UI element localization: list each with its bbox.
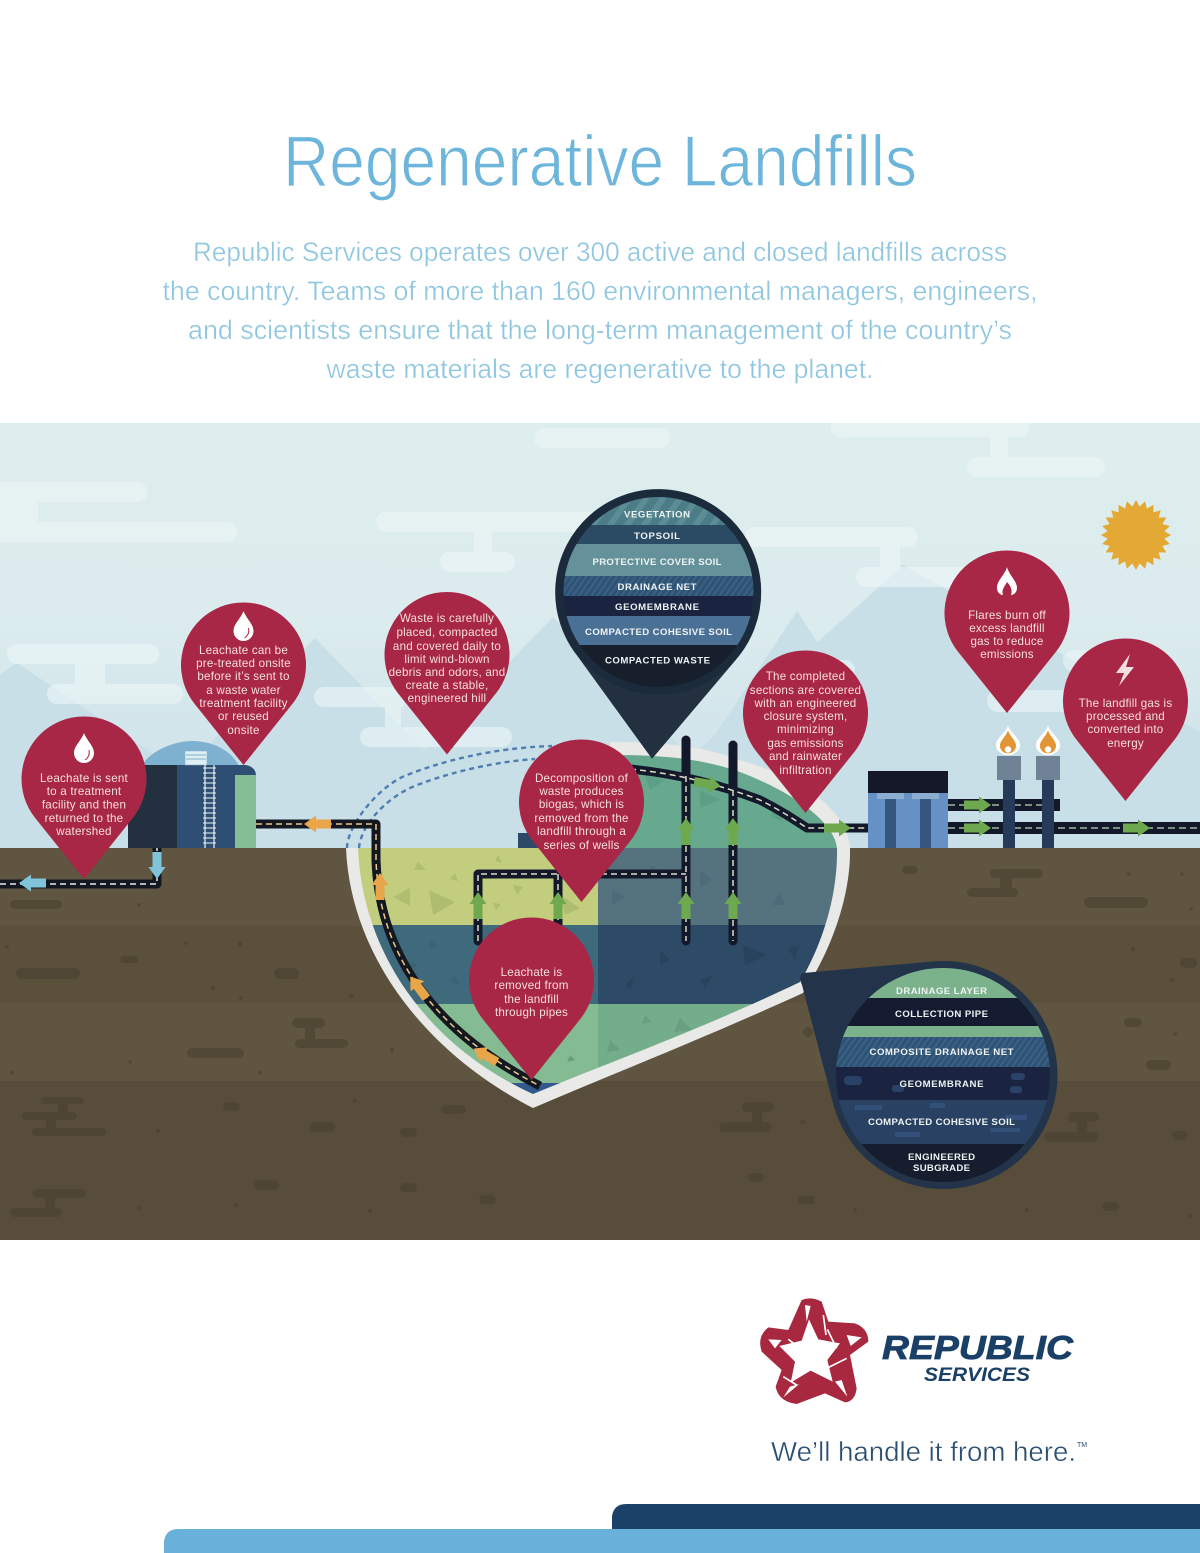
pin: leachate sent to treatment: Leachate is sent: [40, 772, 129, 785]
pin: leachate pre-treated: pre-treated onsite: [196, 657, 291, 670]
logo wordmark: REPUBLIC: [882, 1329, 1074, 1366]
landfill layers: [358, 755, 838, 1094]
power plant building: [868, 771, 948, 848]
pin: closure system: with an engineered: [754, 697, 856, 710]
pin: closure system: sections are covered: [750, 684, 861, 697]
pin: closure layers: COMPACTED WASTE: [605, 656, 711, 666]
ground layers: [0, 848, 1200, 1240]
pin: leachate pre-treated: a waste water: [206, 684, 281, 697]
pin: leachate removed: removed from: [494, 979, 569, 992]
pin: waste placement: create a stable,: [406, 679, 488, 692]
gas flares: [996, 726, 1060, 848]
sky background: [0, 423, 1200, 849]
pin: closure layers: [556, 490, 761, 758]
pin: flares: gas to reduce: [970, 635, 1044, 648]
pin: leachate sent to treatment: to a treatment: [47, 785, 122, 798]
flow arrows: [19, 773, 1150, 1069]
pin: liner layers: COMPOSITE DRAINAGE NET: [870, 1047, 1014, 1058]
dashed containment arcs: [347, 746, 552, 848]
pin: liner layers: COLLECTION PIPE: [895, 1009, 989, 1020]
pin: decomposition and biogas: series of wells: [543, 839, 620, 852]
intro text block: waste materials are regenerative to the planet.: [326, 354, 873, 384]
pin: decomposition and biogas: biogas, which is: [539, 798, 624, 811]
pin: flares: excess landfill: [969, 622, 1045, 635]
pin: liner layers: GEOMEMBRANE: [900, 1079, 984, 1090]
landfill outer liner: [346, 742, 850, 1108]
pin: leachate pre-treated: [181, 602, 306, 765]
pin: closure layers: GEOMEMBRANE: [615, 602, 700, 613]
pin: waste placement: placed, compacted: [396, 626, 498, 639]
pin: waste placement: and covered daily to: [393, 640, 501, 653]
pin: liner layers: ENGINEERED: [908, 1152, 975, 1163]
pin: leachate pre-treated: Leachate can be: [199, 644, 288, 657]
pin: decomposition and biogas: waste produces: [538, 785, 624, 798]
landfill cross section: [340, 740, 858, 1108]
intro text block: Republic Services operates over 300 active and closed landfills across: [193, 237, 1007, 267]
facility block behind landfill: [518, 833, 560, 848]
pin: leachate sent to treatment: returned to the: [45, 812, 123, 825]
pin: leachate sent to treatment: watershed: [55, 825, 112, 838]
pin: leachate pre-treated: onsite: [227, 724, 260, 737]
pin: closure system: minimizing: [777, 723, 834, 736]
pin: leachate pre-treated: before it’s sent to: [197, 670, 290, 683]
leachate pipes: [0, 824, 540, 1086]
pin: landfill gas to energy: processed and: [1086, 710, 1165, 723]
pin: decomposition and biogas: removed from the: [534, 812, 629, 825]
pin: leachate removed: [469, 917, 594, 1080]
pin: liner layers: SUBGRADE: [913, 1163, 971, 1174]
pin: waste placement: [384, 592, 510, 754]
pin: waste placement: Waste is carefully: [400, 612, 494, 625]
pin: liner layers: [800, 961, 1060, 1189]
pin: flares: Flares burn off: [968, 609, 1046, 622]
pin: closure layers: VEGETATION: [624, 510, 690, 520]
pin: waste placement: limit wind-blown: [404, 653, 490, 666]
pin: leachate sent to treatment: [22, 716, 147, 879]
pin: leachate removed: the landfill: [504, 993, 559, 1006]
pin: closure system: gas emissions: [767, 737, 844, 750]
pin: closure system: closure system,: [764, 710, 847, 723]
pin: landfill gas to energy: converted into: [1088, 723, 1163, 736]
clouds: [0, 417, 1113, 747]
icon: sun: [1101, 500, 1171, 570]
pin: closure system: The completed: [766, 670, 845, 683]
logo: Republic Services: [760, 1298, 1074, 1404]
pin: flares: [944, 550, 1070, 713]
pin: closure system: and rainwater: [769, 750, 842, 763]
pin: landfill gas to energy: [1063, 638, 1188, 801]
tagline: TM: [1077, 1442, 1087, 1449]
pin: closure system: infiltration: [779, 764, 832, 777]
treatment tank: [128, 741, 256, 848]
pin: decomposition and biogas: landfill through a: [537, 825, 626, 838]
pin: waste placement: debris and odors, and: [389, 666, 505, 679]
pin: leachate sent to treatment: facility and then: [42, 798, 126, 812]
pin: closure layers: COMPACTED COHESIVE SOIL: [585, 627, 732, 638]
pin: closure layers: PROTECTIVE COVER SOIL: [592, 557, 722, 568]
pin: closure layers: TOPSOIL: [634, 531, 680, 542]
intro text block: and scientists ensure that the long-term management of the country’s: [188, 315, 1012, 345]
pin: leachate pre-treated: or reused: [218, 710, 269, 723]
intro text block: the country. Teams of more than 160 environmental managers, engineers,: [162, 276, 1038, 306]
mountains: [0, 565, 1200, 900]
intro text block: [162, 237, 1038, 384]
soil texture: [5, 866, 1197, 1218]
pin: flares: emissions: [980, 648, 1034, 661]
biogas pipes and wells: [478, 740, 1200, 941]
pin: leachate pre-treated: treatment facility: [199, 697, 288, 710]
tagline: We’ll handle it from here.: [771, 1436, 1076, 1467]
logo: Republic Services: SERVICES: [924, 1364, 1030, 1386]
pin: landfill gas to energy: energy: [1107, 737, 1144, 750]
pin: liner layers: DRAINAGE LAYER: [896, 986, 987, 997]
pin: decomposition and biogas: [519, 739, 644, 902]
pin: waste placement: engineered hill: [408, 692, 486, 705]
pin: leachate removed: through pipes: [495, 1006, 568, 1019]
pin: landfill gas to energy: The landfill gas is: [1079, 697, 1172, 710]
pin: closure system: [743, 650, 868, 813]
footer bars: [164, 1504, 1200, 1553]
title: Regenerative Landfills: [283, 122, 917, 202]
pin: closure layers: DRAINAGE NET: [618, 582, 697, 593]
logo star: [760, 1298, 868, 1404]
pin: liner layers: COMPACTED COHESIVE SOIL: [868, 1117, 1015, 1128]
pin: leachate removed: Leachate is: [501, 966, 562, 979]
pin: decomposition and biogas: Decomposition of: [535, 772, 629, 785]
